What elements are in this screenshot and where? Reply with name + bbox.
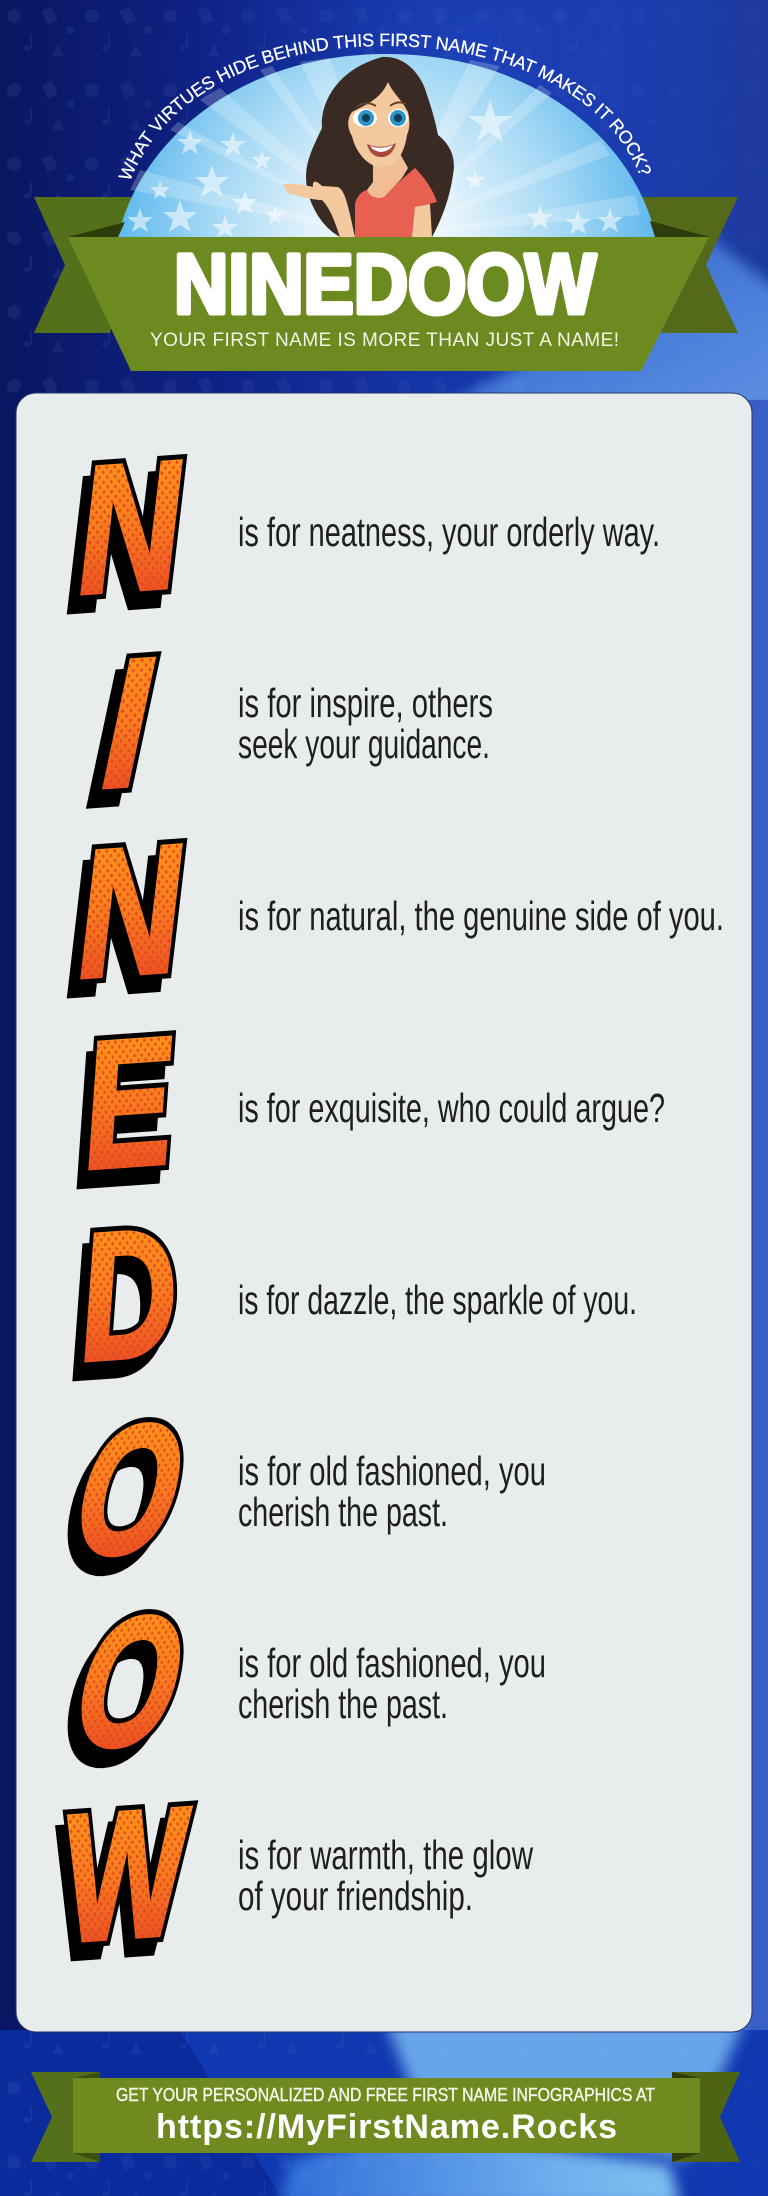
row 2: letter I: I (100, 620, 156, 826)
row 4: letter E: E (77, 1000, 182, 1207)
footer line 1: GET YOUR PERSONALIZED AND FREE FIRST NAME INFOGRAPHICS AT (116, 2085, 655, 2105)
row 2: text: is for inspire, others (238, 680, 493, 726)
title: NINEDOOW (174, 237, 597, 331)
row 6: text (238, 1448, 546, 1535)
row 5: letter D: D (73, 1191, 183, 1399)
row 8: letter W: W (57, 1770, 203, 1980)
row 7: text: is for old fashioned, you (238, 1640, 546, 1686)
woman illustration (283, 57, 454, 237)
row 3: letter N: N (65, 822, 177, 1031)
row 4: letter E: E (68, 1014, 174, 1221)
panel (16, 393, 752, 2032)
row 2: text (238, 680, 493, 767)
row 5: letter D: D (73, 1191, 183, 1399)
row 6: letter O: O (65, 1385, 192, 1595)
row 3: letter N: N (74, 808, 186, 1016)
row 5: letter D: D (64, 1206, 174, 1413)
row 8: letter W: W (57, 1770, 203, 1980)
row 3: letter N: N (74, 808, 186, 1016)
row 1: letter N: N (65, 438, 177, 647)
row 6: text: cherish the past. (238, 1489, 448, 1535)
row 2: letter I: I (88, 635, 144, 841)
face and neck (367, 150, 408, 198)
row 4: letter E: E (77, 1000, 182, 1207)
row 7: letter O: O (65, 1577, 192, 1787)
curved tagline: WHAT VIRTUES HIDE BEHIND THIS FIRST NAME THAT MAKES IT ROCK? (118, 34, 651, 179)
sunburst dome with stars (118, 54, 656, 237)
footer ribbon (31, 2072, 740, 2162)
row 6: letter O: O (54, 1400, 181, 1610)
row 5: letter D: D (73, 1191, 183, 1399)
shirt (355, 168, 437, 237)
row 4: letter E: E (77, 1000, 182, 1207)
main ribbon banner (68, 221, 710, 371)
row 7: letter O: O (65, 1577, 192, 1787)
row 7: text (238, 1640, 546, 1727)
row 7: letter O: O (65, 1577, 192, 1787)
eyes (353, 102, 408, 127)
row 8: text: of your friendship. (238, 1873, 473, 1919)
footer url: https://MyFirstName.Rocks (156, 2108, 617, 2146)
row 7: text: cherish the past. (238, 1681, 448, 1727)
row 3: letter N: N (74, 808, 186, 1016)
row 6: letter O: O (65, 1385, 192, 1595)
row 7: letter O: O (54, 1592, 181, 1802)
row 1: letter N: N (74, 424, 186, 632)
row 2: text: seek your guidance. (238, 721, 490, 767)
row 2: letter I: I (100, 620, 156, 826)
row 8: letter W: W (57, 1770, 203, 1980)
row 8: text (238, 1832, 533, 1919)
row 6: text: is for old fashioned, you (238, 1448, 546, 1494)
row 1: letter N: N (74, 424, 186, 632)
row 2: letter I: I (100, 620, 156, 826)
row 1: letter N: N (74, 424, 186, 632)
row 6: letter O: O (65, 1385, 192, 1595)
hair (306, 57, 454, 237)
subtitle: YOUR FIRST NAME IS MORE THAN JUST A NAME! (150, 330, 619, 351)
row 8: letter W: W (48, 1785, 194, 1995)
ribbon tails: header (34, 197, 738, 333)
arm and hand (283, 182, 355, 237)
smile (367, 143, 396, 157)
row 8: text: is for warmth, the glow (238, 1832, 533, 1878)
